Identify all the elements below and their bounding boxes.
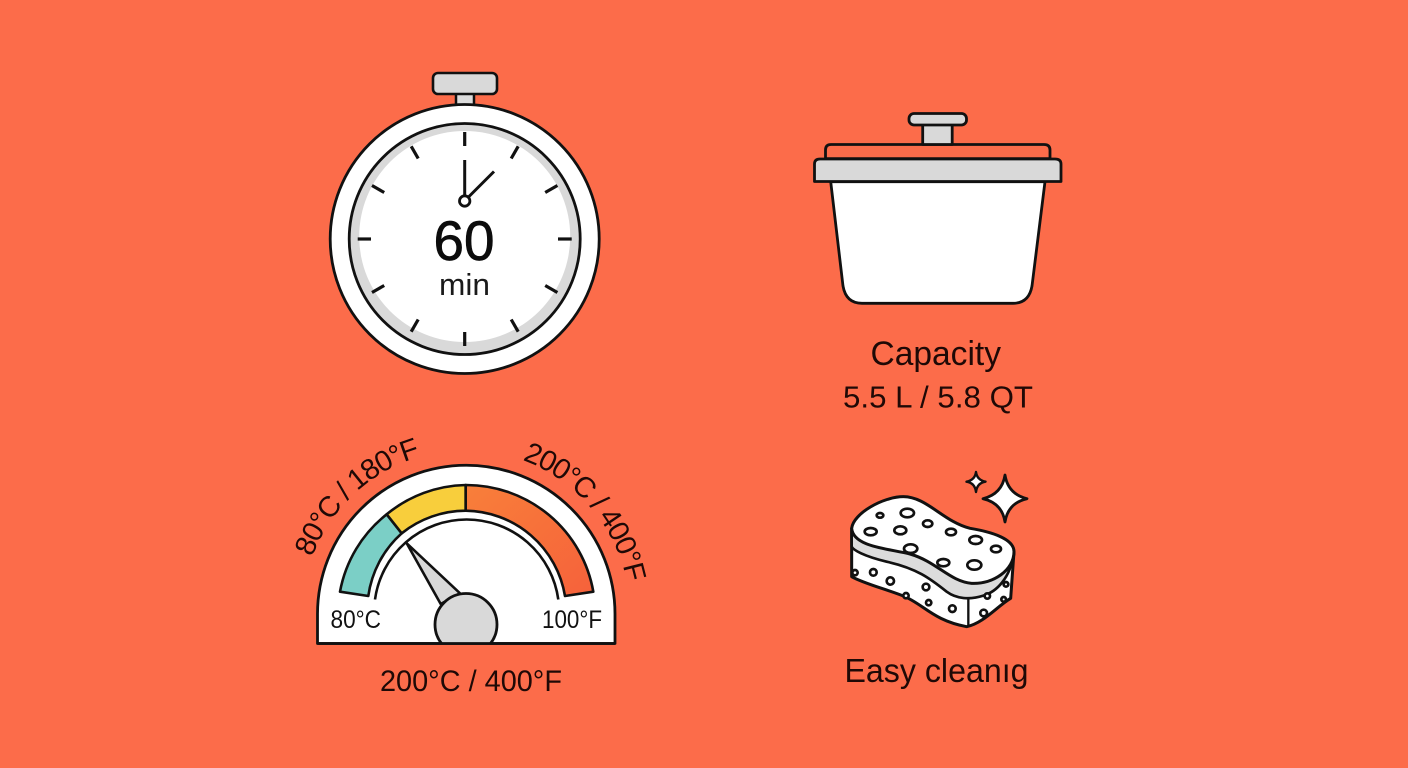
capacity label: Capacity xyxy=(870,335,1001,373)
curved label: low range: 80°C / 180°F xyxy=(296,438,416,554)
dial tick marks xyxy=(358,132,572,346)
panel: capacity xyxy=(814,114,1061,414)
icon: large sparkle xyxy=(983,475,1027,522)
gauge hub xyxy=(434,592,498,642)
panel: timer xyxy=(330,73,599,374)
gauge caption: 200°C / 400°F xyxy=(380,665,562,698)
gauge zone: orange xyxy=(466,485,593,596)
panel: temperature gauge xyxy=(296,438,646,698)
gauge face xyxy=(318,465,615,644)
icon: pot xyxy=(814,114,1061,303)
panel: easy cleaning xyxy=(844,472,1028,689)
stopwatch hands xyxy=(460,160,494,206)
icon: stopwatch case xyxy=(330,104,599,374)
icon: stopwatch stem xyxy=(456,92,474,108)
icon: stopwatch button xyxy=(433,73,497,94)
icon: small sparkle xyxy=(966,472,986,492)
infographic canvas xyxy=(296,72,1062,692)
cleaning label: Easy cleanıg xyxy=(844,652,1028,689)
gauge low label: 80°C xyxy=(330,606,381,634)
gauge base line xyxy=(318,642,615,645)
icon: stopwatch dial xyxy=(349,124,580,354)
timer value: 60 xyxy=(434,209,494,272)
gauge zone: yellow xyxy=(387,485,466,533)
gauge needle xyxy=(407,543,460,604)
timer unit: min xyxy=(439,267,490,302)
capacity value: 5.5 L / 5.8 QT xyxy=(843,380,1033,414)
gauge inner arc xyxy=(375,520,558,600)
curved label: high range: 200°C / 400°F xyxy=(524,444,646,580)
icon: sponge xyxy=(852,497,1014,627)
gauge zone: teal xyxy=(340,514,402,596)
gauge high label: 100°F xyxy=(542,606,602,634)
